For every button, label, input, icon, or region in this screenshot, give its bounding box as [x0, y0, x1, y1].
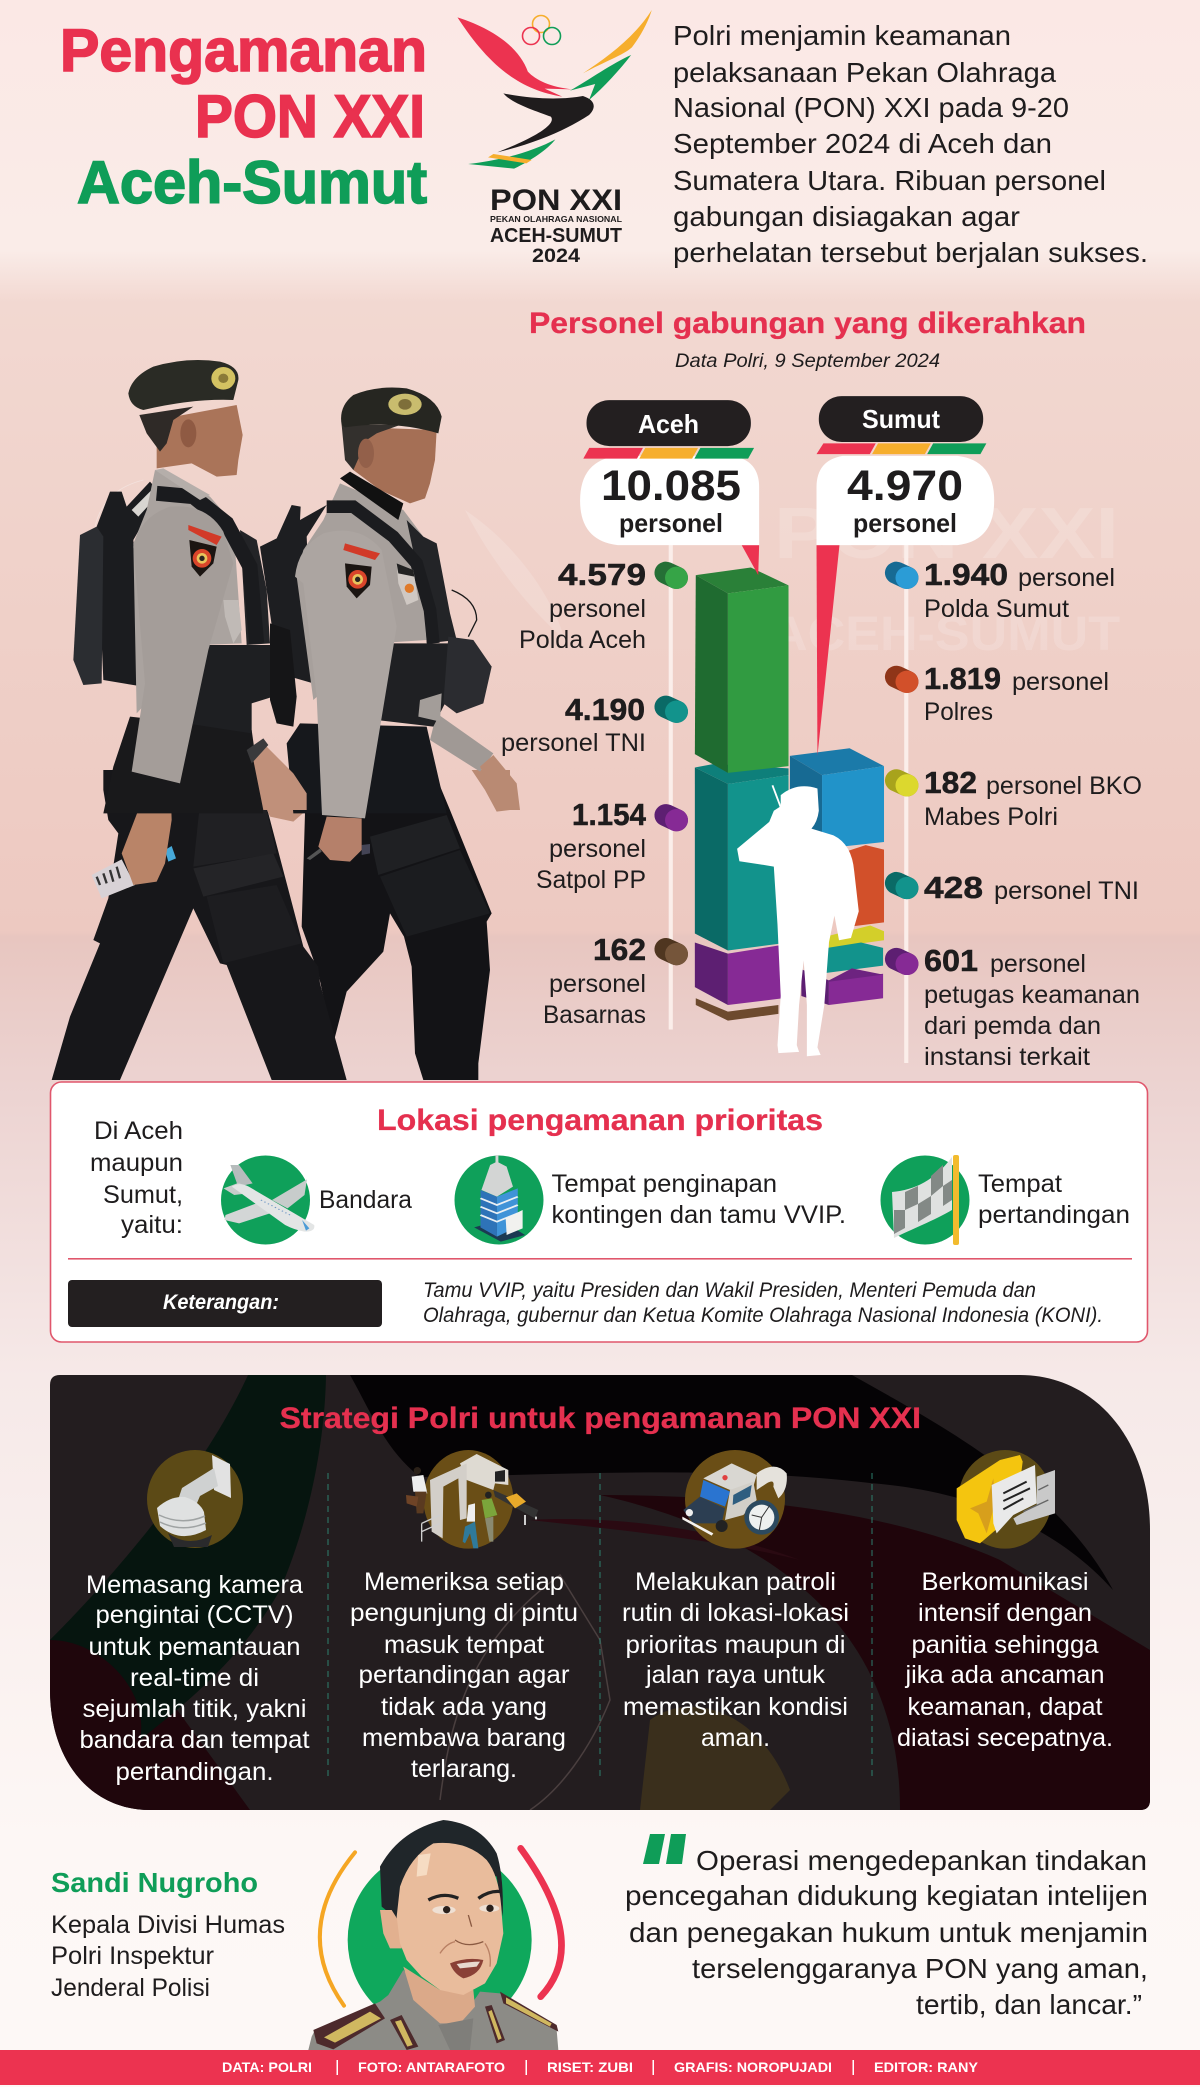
- footer credits bar: GRAFIS: NOROPUJADI: [674, 2059, 832, 2075]
- text: tempat penginapan: kontingen dan tamu VVIP.: [552, 1201, 846, 1229]
- column 3: [622, 1568, 849, 1752]
- heading: personel gabungan: [529, 307, 1086, 372]
- column 4: intensif dengan: [918, 1599, 1092, 1627]
- labels: Aceh: [501, 557, 647, 1029]
- column 2: pengunjung di pintu: [350, 1599, 578, 1627]
- column 3: prioritas maupun di: [626, 1631, 846, 1659]
- intro paragraph: [673, 20, 1148, 268]
- labels: Sumut: 428: [924, 870, 983, 905]
- guide lines: [669, 543, 908, 1063]
- text: tempat pertandingan: Tempat: [978, 1170, 1062, 1198]
- column 2: pertandingan agar: [358, 1661, 570, 1689]
- intro paragraph: Sumatera Utara. Ribuan personel: [673, 165, 1106, 196]
- totals: personel: [619, 508, 723, 538]
- icon: airplane: [221, 1156, 314, 1244]
- intro paragraph: pelaksanaan Pekan Olahraga: [673, 57, 1056, 88]
- icon: white person with radio: [737, 785, 859, 1056]
- column 1: real-time di: [130, 1664, 259, 1692]
- callout pointers: [742, 545, 839, 756]
- labels: Aceh: personel: [549, 835, 646, 863]
- icon: CCTV: [147, 1450, 243, 1548]
- footer credits bar: RISET: ZUBI: [547, 2059, 633, 2075]
- officer on the left: [73, 360, 307, 813]
- speaker name and role: Jenderal Polisi: [51, 1974, 210, 2002]
- portrait: Sandi Nugroho: [308, 1820, 561, 2050]
- totals: Aceh: [638, 409, 699, 439]
- labels: Sumut: dari pemda dan: [924, 1012, 1101, 1040]
- labels: Aceh: 162: [593, 932, 646, 967]
- bars: Sumut stack: [790, 748, 884, 1005]
- keterangan text: [423, 1279, 1103, 1327]
- column 2: [350, 1568, 578, 1783]
- speaker name and role: Kepala Divisi Humas: [51, 1911, 285, 1939]
- photo: two police officers walking: [52, 360, 520, 1080]
- labels: Aceh: Polda Aceh: [519, 626, 646, 654]
- column 1: Memasang kamera: [86, 1571, 303, 1599]
- footer credits bar: [0, 2050, 1200, 2085]
- intro label: Sumut,: [103, 1181, 183, 1209]
- text: bandara: Bandara: [319, 1186, 412, 1214]
- labels: Aceh: personel: [549, 595, 646, 623]
- intro label: maupun: [90, 1149, 183, 1177]
- labels: Sumut: 1.819: [924, 661, 1001, 696]
- watermark: PON XXI: [465, 494, 1120, 661]
- text: tempat penginapan: [552, 1170, 846, 1229]
- quote: [625, 1845, 1148, 2020]
- text: tempat pertandingan: [978, 1170, 1130, 1229]
- totals: personel: [853, 508, 957, 538]
- column 1: bandara dan tempat: [80, 1726, 310, 1754]
- icon: security gate: [406, 1450, 538, 1549]
- quote: pencegahan didukung kegiatan intelijen: [625, 1880, 1148, 1911]
- labels: Sumut: personel BKO: [986, 772, 1142, 800]
- icon: quotation mark: [643, 1834, 686, 1864]
- column 4: jika ada ancaman: [904, 1661, 1104, 1689]
- speaker name and role: Sandi Nugroho: [51, 1867, 258, 1898]
- footer credits bar: EDITOR: RANY: [874, 2059, 979, 2075]
- column 2: masuk tempat: [384, 1631, 544, 1659]
- intro label: yaitu:: [121, 1211, 183, 1239]
- labels: Sumut: Mabes Polri: [924, 803, 1058, 831]
- bubble: Sumut total: [817, 396, 994, 545]
- intro label: Di Aceh: [94, 1117, 183, 1145]
- column 3: rutin di lokasi-lokasi: [622, 1599, 849, 1627]
- footer credits bar: DATA: POLRI: [222, 2059, 312, 2075]
- text: tempat pertandingan: pertandingan: [978, 1201, 1130, 1229]
- keterangan label: Keterangan:: [163, 1291, 279, 1314]
- labels: Aceh: Basarnas: [543, 1001, 646, 1029]
- labels: Sumut: 182: [924, 765, 977, 800]
- column 3: Melakukan patroli: [635, 1568, 836, 1596]
- quote: terselenggaranya PON yang aman,: [692, 1953, 1148, 1984]
- labels: Sumut: petugas keamanan: [924, 981, 1140, 1009]
- title: Aceh-Sumut: [77, 149, 427, 216]
- column 1: pertandingan.: [116, 1758, 274, 1786]
- keterangan text: Olahraga, gubernur dan Ketua Komite Olahraga Nasional Indonesia (KONI).: [423, 1304, 1103, 1327]
- labels: Aceh: personel TNI: [501, 729, 646, 757]
- labels: Sumut: personel: [1012, 668, 1109, 696]
- speaker name and role: Polri Inspektur: [51, 1942, 214, 1970]
- heading: Strategi Polri untuk pengamanan PON XXI: [280, 1402, 921, 1435]
- quote: dan penegakan hukum untuk menjamin: [629, 1917, 1148, 1948]
- panel: lokasi pengamanan prioritas: [50, 1082, 1148, 1342]
- intro paragraph: September 2024 di Aceh dan: [673, 128, 1052, 159]
- labels: Aceh: personel: [549, 970, 646, 998]
- intro paragraph: perhelatan tersebut berjalan sukses.: [673, 237, 1148, 268]
- logo: PON XXI: ACEH-SUMUT: [490, 225, 622, 247]
- watermark: PON XXI: PON XXI: [774, 494, 1119, 574]
- bubble: Aceh total: [580, 400, 759, 545]
- column 2: tidak ada yang: [381, 1693, 547, 1721]
- officer on the right: [260, 387, 520, 818]
- labels: Sumut: 1.940: [924, 557, 1008, 592]
- column 2: Memeriksa setiap: [364, 1568, 564, 1596]
- column 1: pengintai (CCTV): [96, 1601, 294, 1629]
- labels: Aceh: 4.579: [558, 557, 646, 592]
- icon: chat badge: [957, 1450, 1055, 1549]
- intro paragraph: Polri menjamin keamanan: [673, 20, 1011, 51]
- watermark: PON XXI: ACEH-SUMUT: [770, 608, 1120, 661]
- column 4: keamanan, dapat: [908, 1693, 1103, 1721]
- totals: 4.970: [847, 462, 963, 510]
- labels: Aceh: Satpol PP: [536, 866, 646, 894]
- bars: Aceh stack: [695, 567, 789, 1021]
- column 1: [80, 1571, 310, 1786]
- quote: Operasi mengedepankan tindakan: [696, 1845, 1147, 1876]
- totals: Sumut: [862, 404, 940, 434]
- column 1: untuk pemantauan: [88, 1633, 300, 1661]
- totals: [601, 404, 963, 538]
- labels: Sumut: personel: [1018, 564, 1115, 592]
- heading: Lokasi pengamanan prioritas: [377, 1104, 823, 1137]
- logo: PON XXI: PON XXI: [490, 184, 622, 217]
- logo: PON XXI: [457, 10, 652, 267]
- labels: Aceh: 4.190: [565, 692, 645, 727]
- labels: Sumut: personel TNI: [994, 877, 1139, 905]
- labels: Sumut: instansi terkait: [924, 1043, 1090, 1071]
- column dividers: [328, 1473, 872, 1780]
- column 3: aman.: [701, 1724, 770, 1752]
- logo: PON XXI: 2024: [532, 246, 580, 267]
- keterangan text: Tamu VVIP, yaitu Presiden dan Wakil Presiden, Menteri Pemuda dan: [423, 1279, 1036, 1302]
- labels: Sumut: Polres: [924, 698, 993, 726]
- column 1: sejumlah titik, yakni: [82, 1695, 306, 1723]
- icon: racing flag: [880, 1155, 970, 1245]
- intro label: [90, 1117, 183, 1239]
- speaker name and role: [51, 1867, 285, 2002]
- labels: Sumut: Polda Sumut: [924, 595, 1069, 623]
- labels: Sumut: 601: [924, 943, 978, 978]
- panel: strategi polri: [50, 1375, 1150, 1810]
- column 4: panitia sehingga: [912, 1631, 1099, 1659]
- labels: Sumut: [924, 557, 1142, 1071]
- intro paragraph: gabungan disiagakan agar: [673, 201, 1020, 232]
- title: Pengamanan: [60, 17, 427, 84]
- heading: personel gabungan: Data Polri, 9 September 2024: [675, 351, 940, 372]
- column 4: diatasi secepatnya.: [897, 1724, 1113, 1752]
- icon: hotel tower: [454, 1155, 544, 1244]
- column 4: [897, 1568, 1113, 1752]
- quote: tertib, dan lancar.”: [916, 1989, 1142, 2020]
- logo: PON XXI: PEKAN OLAHRAGA NASIONAL: [490, 214, 622, 224]
- column 2: membawa barang: [362, 1724, 566, 1752]
- column 3: jalan raya untuk: [645, 1661, 825, 1689]
- text: tempat penginapan: Tempat penginapan: [552, 1170, 777, 1198]
- title: PON XXI: [195, 83, 425, 150]
- title: [60, 17, 427, 216]
- column 2: terlarang.: [411, 1755, 517, 1783]
- labels: Aceh: 1.154: [572, 797, 647, 832]
- footer credits bar: FOTO: ANTARAFOTO: [358, 2059, 505, 2075]
- keterangan label: [68, 1280, 382, 1327]
- dots: [665, 567, 918, 975]
- chart: personel bars and labels: [501, 396, 1142, 1071]
- intro paragraph: Nasional (PON) XXI pada 9-20: [673, 92, 1069, 123]
- icon: patrol car: [682, 1450, 787, 1549]
- totals: 10.085: [601, 462, 741, 510]
- column 3: memastikan kondisi: [623, 1693, 848, 1721]
- column 4: Berkomunikasi: [922, 1568, 1088, 1596]
- labels: Sumut: personel: [990, 950, 1086, 978]
- heading: personel gabungan: Personel gabungan yang dikerahkan: [529, 307, 1086, 340]
